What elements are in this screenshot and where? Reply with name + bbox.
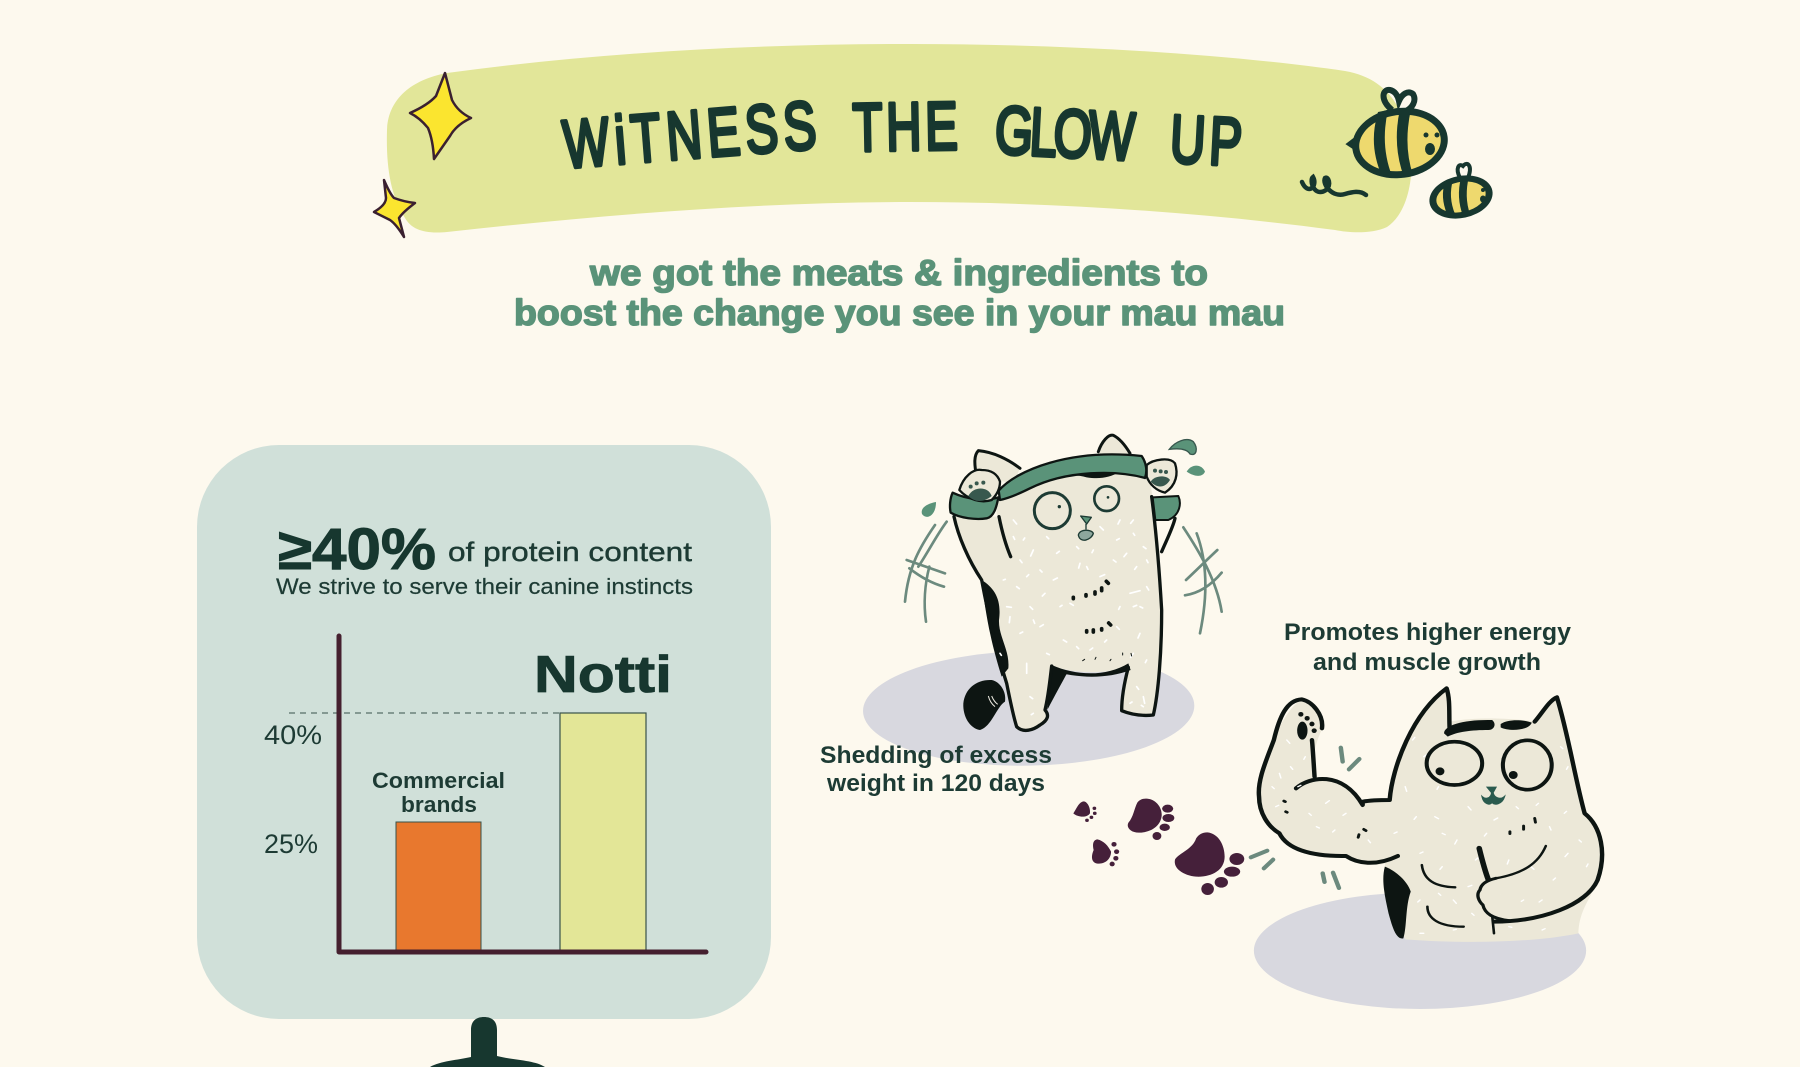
nose bbox=[1482, 787, 1504, 804]
sweat drops bbox=[1169, 440, 1196, 455]
ears bbox=[975, 451, 1020, 483]
title: UP bbox=[1168, 100, 1244, 181]
big figure: 40 percent: ≥40% bbox=[278, 517, 436, 582]
icon: bee flight trail bbox=[1302, 177, 1366, 195]
label: shedding weight: weight in 120 days bbox=[826, 770, 1045, 797]
right paw bbox=[1147, 459, 1177, 493]
paw pads bbox=[1297, 722, 1308, 740]
label: shedding weight: Shedding of excess bbox=[820, 742, 1052, 769]
speckles bbox=[1272, 737, 1588, 933]
impact lines bbox=[1251, 748, 1359, 888]
subtitle: we got the meats & ingredients to bbox=[589, 252, 1208, 293]
logo: Notti: Notti bbox=[534, 646, 672, 704]
bar label: commercial brands bbox=[372, 768, 505, 817]
label: of protein content: of protein content bbox=[448, 537, 693, 567]
muscle lines bbox=[1422, 846, 1546, 933]
left paw bbox=[959, 470, 1000, 501]
chart axes bbox=[339, 636, 706, 952]
shadow bbox=[1254, 892, 1586, 1009]
illustration: muscle cat bbox=[1073, 688, 1602, 1009]
outline bbox=[954, 497, 1175, 730]
panel: protein content chart bbox=[197, 445, 771, 1019]
chest marks bbox=[1073, 581, 1111, 632]
whisker dots bbox=[1284, 801, 1535, 837]
left wristband bbox=[950, 493, 998, 519]
icon: large sparkle star bbox=[410, 73, 471, 159]
icon: dark plant shape at bottom bbox=[430, 1017, 545, 1067]
bar label: commercial brands: Commercial bbox=[372, 768, 505, 793]
kettlebell bbox=[963, 680, 1005, 730]
icon: small sparkle star bbox=[374, 180, 415, 237]
eyes bbox=[1427, 742, 1482, 785]
hand bbox=[1478, 878, 1509, 921]
title bbox=[560, 86, 1244, 183]
illustration: cat shedding weight bbox=[862, 435, 1222, 769]
right wristband bbox=[1153, 496, 1180, 520]
title: GLOW bbox=[993, 91, 1137, 175]
side patch bbox=[1383, 867, 1411, 938]
bar: Notti bbox=[560, 713, 646, 951]
icon: small bee bbox=[1425, 164, 1497, 224]
forehead patch bbox=[1444, 720, 1532, 737]
title: THE bbox=[852, 87, 958, 166]
label: shedding weight bbox=[820, 742, 1052, 797]
title: WiTNESS bbox=[560, 86, 819, 183]
eyes bbox=[1034, 493, 1070, 529]
title banner: brush stroke bbox=[387, 44, 1412, 232]
icon: large bee bbox=[1348, 90, 1452, 184]
outlines bbox=[1259, 688, 1602, 922]
body fill bbox=[1259, 688, 1602, 942]
body bbox=[954, 462, 1162, 730]
motion lines left bbox=[905, 522, 947, 622]
paw prints bbox=[1073, 799, 1244, 895]
axis label 40%: 40% bbox=[264, 720, 322, 750]
subtitle bbox=[514, 252, 1285, 333]
bar: commercial brands bbox=[396, 822, 481, 951]
nose and mouth bbox=[1081, 516, 1091, 524]
label: energy and muscle: and muscle growth bbox=[1313, 649, 1541, 676]
speckles bbox=[1000, 520, 1149, 715]
bar chart bbox=[264, 636, 706, 952]
shadow bbox=[862, 648, 1195, 769]
headband bbox=[999, 454, 1146, 500]
axis label 25%: 25% bbox=[264, 829, 318, 859]
label: energy and muscle: Promotes higher energy bbox=[1284, 619, 1571, 646]
bar label: commercial brands: brands bbox=[401, 792, 477, 817]
black fur patches bbox=[982, 463, 1131, 710]
subtitle: boost the change you see in your mau mau bbox=[514, 292, 1285, 333]
label: energy and muscle bbox=[1284, 619, 1571, 676]
motion lines right bbox=[1183, 527, 1222, 633]
label: canine instincts: We strive to serve their canine instincts bbox=[276, 574, 693, 599]
